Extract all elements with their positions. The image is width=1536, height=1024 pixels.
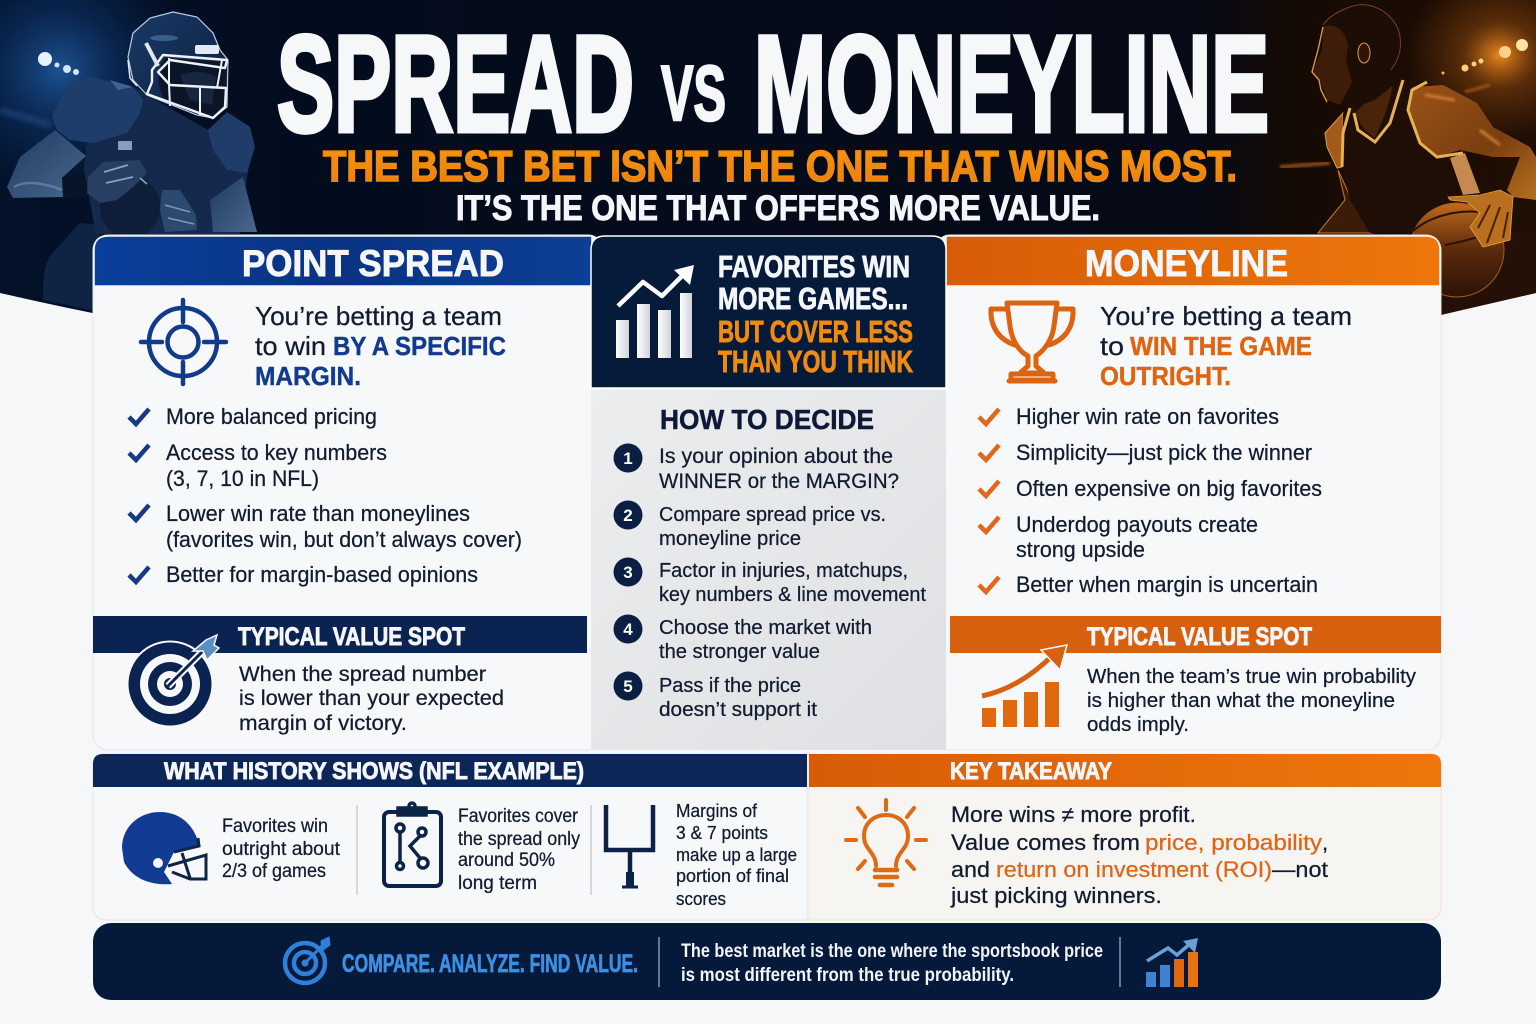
moneyline checklist: Better when margin is uncertain (1016, 572, 1318, 597)
icon: goalpost (606, 805, 653, 887)
stat: favorites win (222, 816, 341, 882)
moneyline definition: WIN THE GAME (1130, 331, 1312, 361)
step 1: Is your opinion about the (659, 445, 893, 468)
subtitle: IT’S THE ONE THAT OFFERS MORE VALUE. (456, 189, 1100, 228)
footer bar (93, 923, 1441, 1000)
icon: bullseye arrow (128, 635, 219, 726)
point spread checklist: More balanced pricing (166, 404, 377, 429)
typical value spot: moneyline: is higher than what the moneyline (1087, 690, 1395, 712)
panel: favorites callout: MORE GAMES... (718, 281, 908, 316)
history header: WHAT HISTORY SHOWS (NFL EXAMPLE) (164, 758, 584, 785)
stat: favorites cover: Favorites cover (458, 806, 579, 827)
icon: helmet (122, 812, 206, 884)
footer bar: The best market is the one where the sportsbook price (681, 941, 1103, 962)
step 3: key numbers & line movement (659, 584, 926, 606)
panel: favorites callout: BUT COVER LESS (718, 314, 913, 349)
stat: margins (676, 801, 797, 909)
moneyline definition: You’re betting a team (1100, 301, 1352, 331)
title: VS (661, 49, 726, 137)
step 2 (614, 500, 886, 550)
step 4 (614, 614, 872, 663)
moneyline checklist (979, 404, 1322, 597)
moneyline checklist: strong upside (1016, 537, 1145, 562)
icon: clipboard (384, 803, 441, 886)
typical value spot: spread: margin of victory. (239, 712, 407, 735)
icon: rising chart (982, 645, 1067, 727)
step 5 (614, 672, 817, 721)
moneyline checklist: Higher win rate on favorites (1016, 404, 1279, 429)
step 3: 3 (623, 563, 633, 582)
title (277, 8, 1269, 161)
point spread checklist (129, 404, 522, 587)
point spread checklist: Lower win rate than moneylines (166, 501, 470, 526)
stat: favorites win: 2/3 of games (222, 861, 326, 882)
panel: how to decide (591, 390, 946, 750)
typical value spot: moneyline: odds imply. (1087, 714, 1189, 736)
stat: favorites cover: around 50% (458, 850, 555, 871)
moneyline checklist: Underdog payouts create (1016, 512, 1258, 537)
step 2: moneyline price (659, 528, 801, 550)
stat: favorites cover: long term (458, 873, 537, 894)
step 1 (614, 444, 899, 493)
key takeaway text: and (951, 857, 990, 882)
moneyline definition: to (1100, 331, 1124, 361)
step 1: WINNER or the MARGIN? (659, 470, 899, 493)
icon: growth chart (616, 265, 694, 358)
stat: favorites cover: the spread only (458, 829, 580, 850)
step 4: Choose the market with (659, 617, 872, 639)
step 1: 1 (623, 449, 633, 468)
step 5: 5 (623, 677, 633, 696)
icon: footer chart (1146, 938, 1198, 987)
stat: favorites win: outright about (222, 839, 341, 860)
key takeaway text: , (1322, 830, 1328, 855)
point spread definition (255, 301, 506, 391)
step 5: doesn’t support it (659, 699, 817, 721)
title: SPREAD (277, 8, 634, 161)
panel: how to decide: HOW TO DECIDE (660, 404, 874, 435)
typical value spot: spread: When the spread number (239, 663, 486, 686)
key takeaway text: —not (1272, 857, 1328, 882)
typical value spot: spread: TYPICAL VALUE SPOT (238, 623, 465, 651)
panel: what history shows (93, 754, 807, 920)
footer bar: is most different from the true probability. (681, 965, 1014, 986)
panel: favorites callout (591, 236, 946, 388)
point spread definition: BY A SPECIFIC (333, 331, 506, 361)
point spread header (94, 236, 592, 286)
key takeaway text: Value comes from (951, 830, 1140, 855)
point spread definition: You’re betting a team (255, 301, 502, 331)
typical value spot: moneyline (950, 616, 1441, 736)
point spread checklist: Access to key numbers (166, 440, 387, 465)
moneyline header (946, 236, 1440, 286)
typical value spot: spread: is lower than your expected (239, 687, 504, 710)
footer bar: COMPARE. ANALYZE. FIND VALUE. (342, 950, 638, 978)
stat: margins: Margins of (676, 801, 758, 821)
stat: margins: 3 & 7 points (676, 823, 768, 843)
panel: moneyline (935, 235, 1441, 750)
key takeaway text: More wins ≠ more profit. (951, 802, 1196, 827)
moneyline checklist: Simplicity—just pick the winner (1016, 440, 1312, 465)
point spread definition: MARGIN. (255, 361, 361, 391)
key takeaway text (950, 802, 1328, 908)
icon: trophy (991, 303, 1073, 381)
icon: footer target (285, 937, 330, 983)
header background (0, 0, 1536, 382)
typical value spot: moneyline: When the team’s true win probability (1087, 666, 1416, 688)
key takeaway header: KEY TAKEAWAY (950, 758, 1112, 785)
illustration: basketball player (1312, 5, 1536, 315)
point spread definition: to win (255, 331, 326, 361)
history header (93, 754, 807, 787)
moneyline definition: OUTRIGHT. (1100, 361, 1231, 391)
step 4: the stronger value (659, 641, 820, 663)
illustration: football quarterback (7, 12, 257, 312)
step 2: Compare spread price vs. (659, 504, 886, 526)
moneyline header: MONEYLINE (1085, 243, 1288, 284)
panel: favorites callout: FAVORITES WIN (718, 249, 910, 284)
stat: margins: portion of final (676, 866, 789, 886)
key takeaway text: just picking winners. (950, 883, 1162, 908)
step 2: 2 (623, 506, 633, 525)
panel: point spread (93, 235, 603, 750)
icon: light bulb (846, 800, 926, 885)
icon: crosshair (141, 300, 226, 384)
subtitle (323, 142, 1237, 228)
moneyline definition (1100, 301, 1352, 391)
key takeaway text: return on investment (ROI) (996, 857, 1272, 882)
step 3: Factor in injuries, matchups, (659, 560, 908, 582)
point spread header: POINT SPREAD (242, 243, 504, 284)
subtitle: THE BEST BET ISN’T THE ONE THAT WINS MOST. (323, 142, 1237, 191)
point spread checklist: (favorites win, but don’t always cover) (166, 527, 522, 552)
typical value spot: spread (93, 616, 587, 735)
step 3 (614, 558, 926, 606)
stat: margins: make up a large (676, 845, 797, 865)
stat: margins: scores (676, 889, 726, 909)
stat: favorites cover (458, 806, 580, 894)
step 5: Pass if the price (659, 675, 801, 697)
moneyline checklist: Often expensive on big favorites (1016, 476, 1322, 501)
key takeaway header (809, 754, 1441, 787)
panel: key takeaway (809, 754, 1441, 920)
stat: favorites win: Favorites win (222, 816, 328, 837)
typical value spot: moneyline: TYPICAL VALUE SPOT (1087, 623, 1312, 651)
point spread checklist: Better for margin-based opinions (166, 562, 478, 587)
panel: favorites callout: THAN YOU THINK (718, 344, 913, 379)
key takeaway text: price, probability (1145, 830, 1322, 855)
step 4: 4 (623, 620, 633, 639)
point spread checklist: (3, 7, 10 in NFL) (166, 466, 319, 491)
